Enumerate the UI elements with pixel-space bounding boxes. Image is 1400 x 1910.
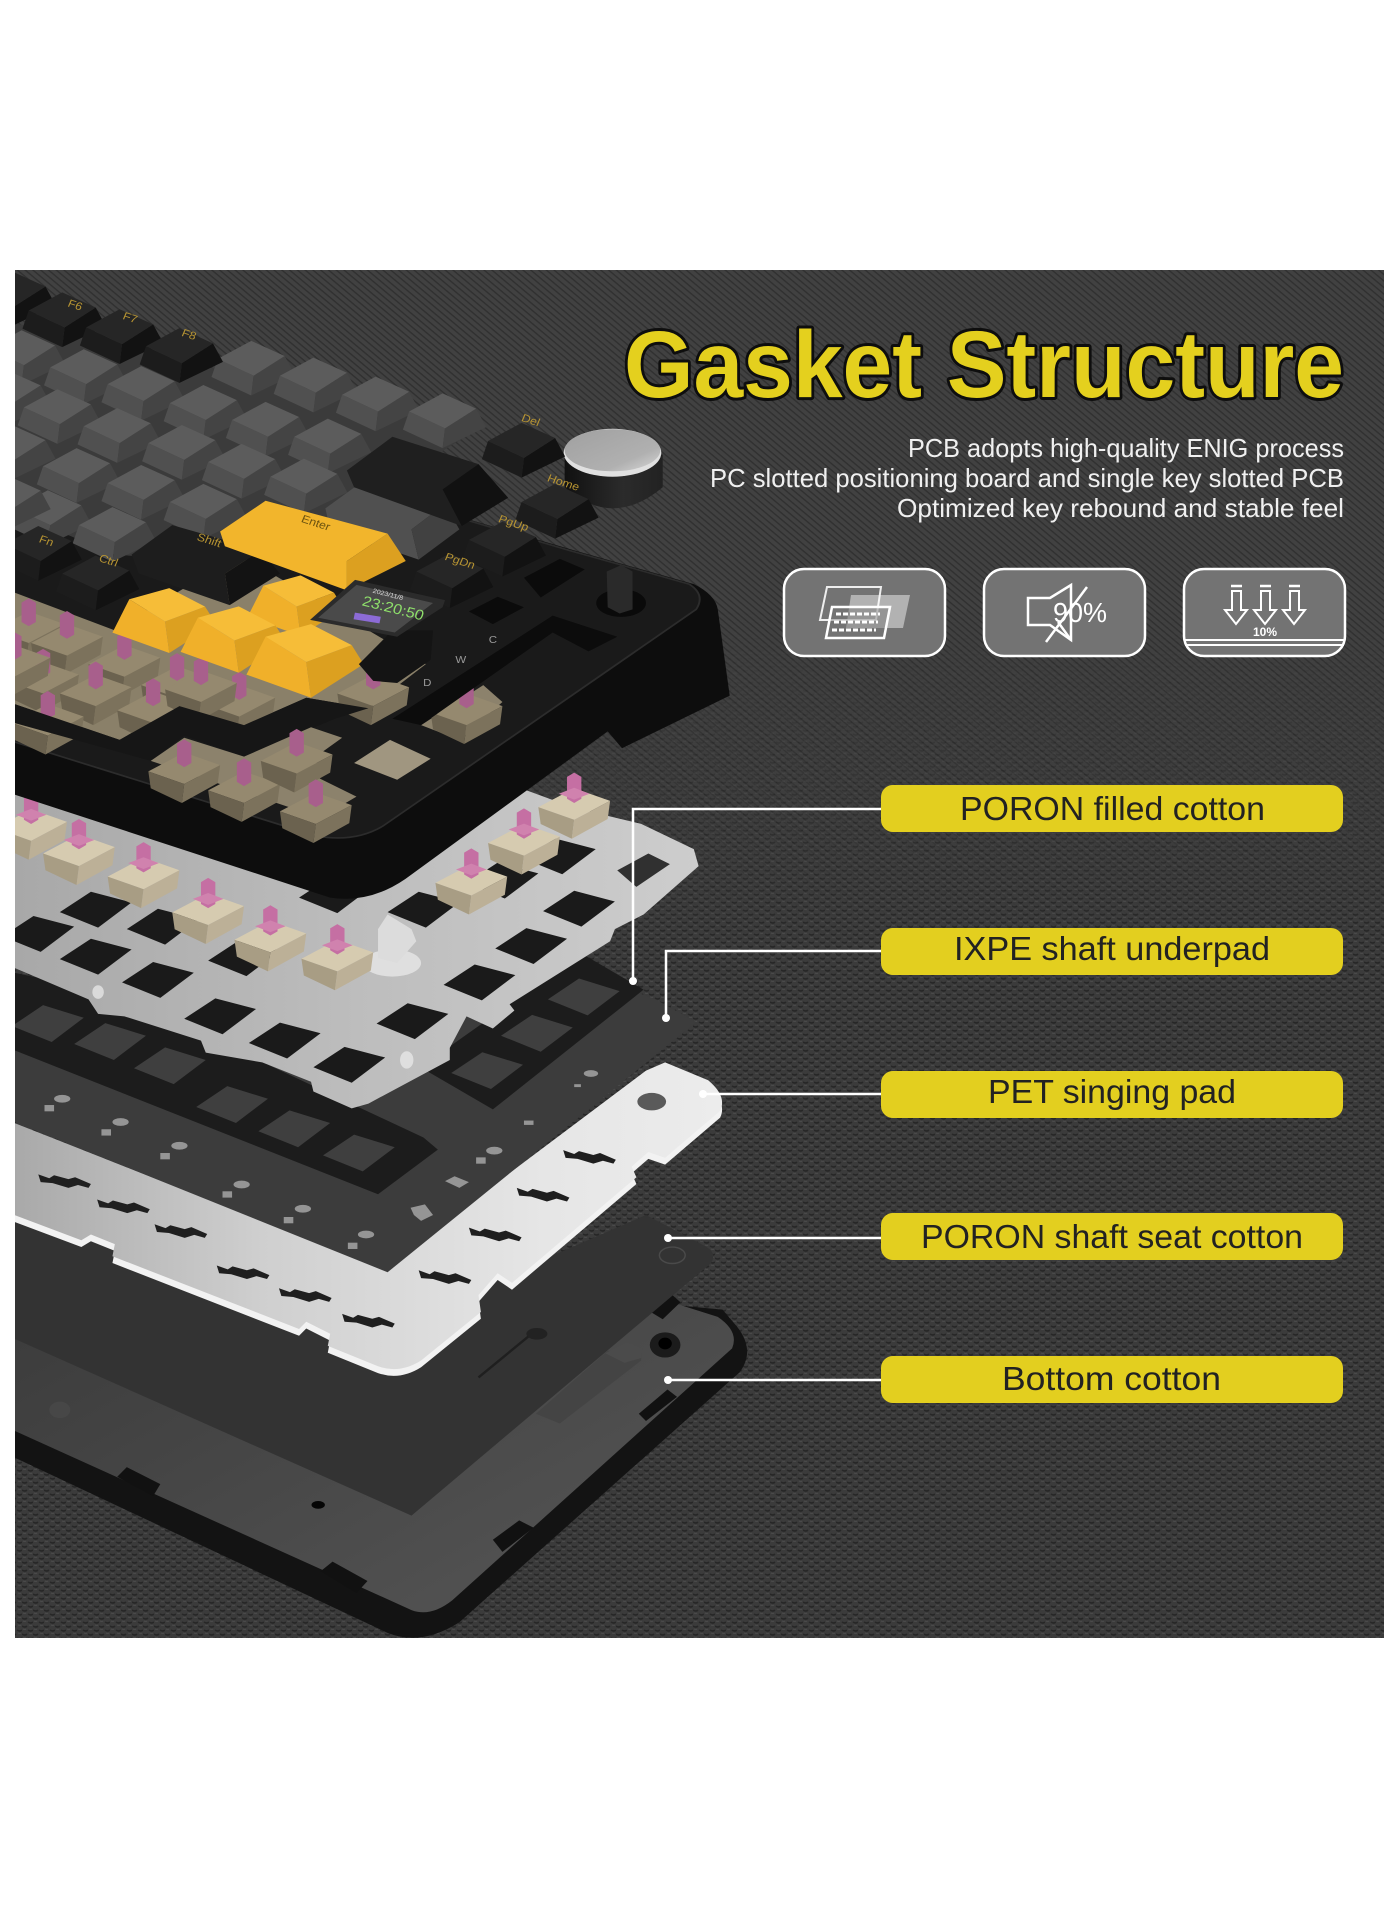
layer: bottom cotton (15, 1305, 734, 1612)
layer: IXPE shaft underpad (14, 992, 696, 1272)
black function keycaps (0, 271, 599, 610)
icon: noise reduction 90% (984, 569, 1145, 656)
underpad perforations (45, 1070, 598, 1249)
case: top slots (469, 559, 585, 624)
case: switch window right (421, 680, 502, 744)
description text: PCB adopts high-quality ENIG process (908, 433, 1344, 463)
description text: Optimized key rebound and stable feel (897, 493, 1344, 523)
lower window switches (148, 729, 352, 843)
foam windows (12, 979, 620, 1171)
case: top surface (15, 520, 701, 839)
case: main switch cavity (14, 555, 426, 740)
key legends: Shift (195, 531, 224, 550)
label: PORON filled cotton: PORON filled cotton (960, 790, 1265, 827)
icon: noise reduction 90%: 90% (1053, 597, 1107, 628)
panel: textured dark background (15, 270, 1384, 1638)
key legends: F7 (121, 310, 139, 326)
label: PORON filled cotton (881, 785, 1343, 832)
key: gray wide (326, 488, 460, 560)
leader line: PET singing pad (699, 1090, 881, 1098)
leader line: Bottom cotton (664, 1376, 881, 1384)
stabilizer clip (378, 914, 416, 952)
key legends: F6 (66, 298, 84, 313)
leader line: PORON shaft seat cotton (664, 1234, 881, 1242)
label: IXPE shaft underpad: IXPE shaft underpad (954, 930, 1270, 967)
label: Bottom cotton: Bottom cotton (1002, 1360, 1221, 1397)
case printed labels: W (455, 655, 467, 666)
icon: layered keyboard plates (784, 569, 945, 656)
case printed labels (423, 635, 497, 689)
layer: PET singing pad (14, 1062, 722, 1376)
description text (710, 433, 1344, 523)
encoder stem (596, 565, 646, 617)
case: lower switch window (150, 727, 356, 807)
key legends: F8 (180, 327, 198, 343)
label: IXPE shaft underpad (881, 928, 1343, 975)
layer: PC positioning board (15, 790, 699, 1108)
icon: rebound arrows 10%: 10% (1253, 625, 1277, 639)
pad slots and mounting hole (38, 1093, 666, 1328)
case clips (117, 1295, 680, 1593)
case: black frame body (15, 520, 730, 898)
key legends: Enter (299, 513, 332, 533)
label: PET singing pad (881, 1071, 1343, 1118)
case printed labels: C (489, 635, 497, 646)
label: Bottom cotton (881, 1356, 1343, 1403)
key legends: Fn (37, 533, 56, 549)
leader line: IXPE shaft underpad (662, 951, 881, 1022)
board switch cutouts (2, 838, 670, 1083)
case: long bar cutout (392, 616, 617, 725)
description text: PC slotted positioning board and single key slotted PCB (710, 463, 1344, 493)
seat cotton details (478, 1247, 685, 1377)
leader line: PORON filled cotton (629, 809, 881, 985)
label: PORON shaft seat cotton (881, 1213, 1343, 1260)
case: front frame rebuilt over cavity (15, 698, 368, 742)
label: PET singing pad: PET singing pad (988, 1073, 1236, 1110)
key: enter yellow (220, 501, 406, 590)
glow highlights on board (92, 949, 421, 1069)
layer: bottom case rim (14, 1305, 747, 1638)
key: shift (132, 525, 280, 605)
upper assembly of the keyboard (0, 271, 730, 990)
key legends: PgDn (443, 551, 477, 572)
layer: PORON filled cotton frame (14, 953, 644, 1194)
yellow arrow keycaps (112, 575, 364, 698)
layer: PORON shaft seat cotton (14, 1215, 713, 1516)
label: PORON shaft seat cotton: PORON shaft seat cotton (921, 1218, 1303, 1255)
key legends: Ctrl (97, 552, 120, 569)
case printed labels: D (423, 678, 432, 689)
display module (310, 580, 445, 683)
case: small window (354, 740, 431, 780)
gray keycaps (0, 330, 486, 562)
key bed under gray keycaps (14, 323, 478, 563)
title: Gasket Structure (624, 312, 1344, 418)
display module: 23:20:50 (360, 593, 426, 624)
key legends: PgUp (497, 513, 531, 534)
bottom plate details (312, 1332, 680, 1509)
infographic canvas (15, 270, 1384, 1638)
switches on positioning board (0, 773, 610, 990)
volume knob (564, 429, 663, 508)
key legends (37, 298, 581, 572)
exploded keyboard illustration (0, 271, 747, 1638)
display module: 2023/11/8 (372, 588, 404, 602)
icon: rebound arrows 10% (1184, 569, 1345, 656)
lower layers of the keyboard (2, 745, 747, 1638)
cavity switches (0, 598, 409, 755)
key: backspace (347, 437, 508, 526)
key legends: Home (545, 472, 581, 494)
key legends: Del (520, 412, 542, 429)
